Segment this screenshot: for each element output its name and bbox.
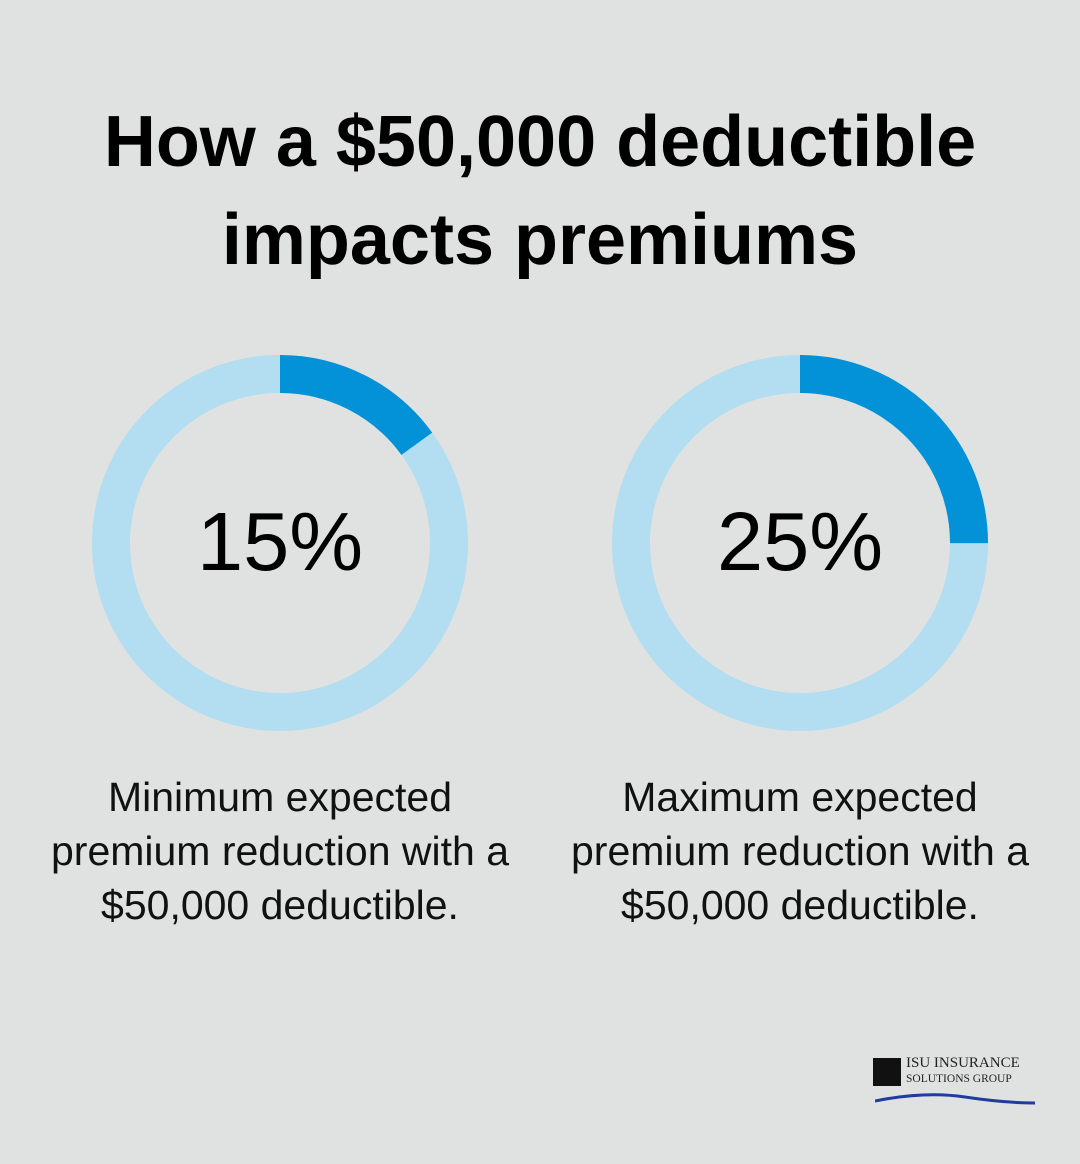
caption: minimum	[51, 774, 510, 928]
logo	[873, 1055, 1035, 1104]
caption: maximum: Maximum expected	[622, 774, 978, 820]
caption: maximum: premium reduction with a	[571, 828, 1029, 874]
title: How a $50,000 deductible	[104, 102, 976, 182]
donut: 15%	[92, 355, 468, 731]
caption: maximum: $50,000 deductible.	[621, 882, 979, 928]
title	[104, 102, 976, 280]
caption: maximum	[571, 774, 1030, 928]
caption: minimum: premium reduction with a	[51, 828, 509, 874]
logo: ISU INSURANCE	[906, 1055, 1020, 1071]
logo: SOLUTIONS GROUP	[906, 1073, 1012, 1085]
caption: minimum: Minimum expected	[108, 774, 452, 820]
caption: minimum: $50,000 deductible.	[101, 882, 459, 928]
donut: 25%: 25%	[717, 495, 883, 588]
donut: 15%: 15%	[197, 495, 363, 588]
title: impacts premiums	[222, 200, 858, 280]
donut: 25%	[612, 355, 988, 731]
